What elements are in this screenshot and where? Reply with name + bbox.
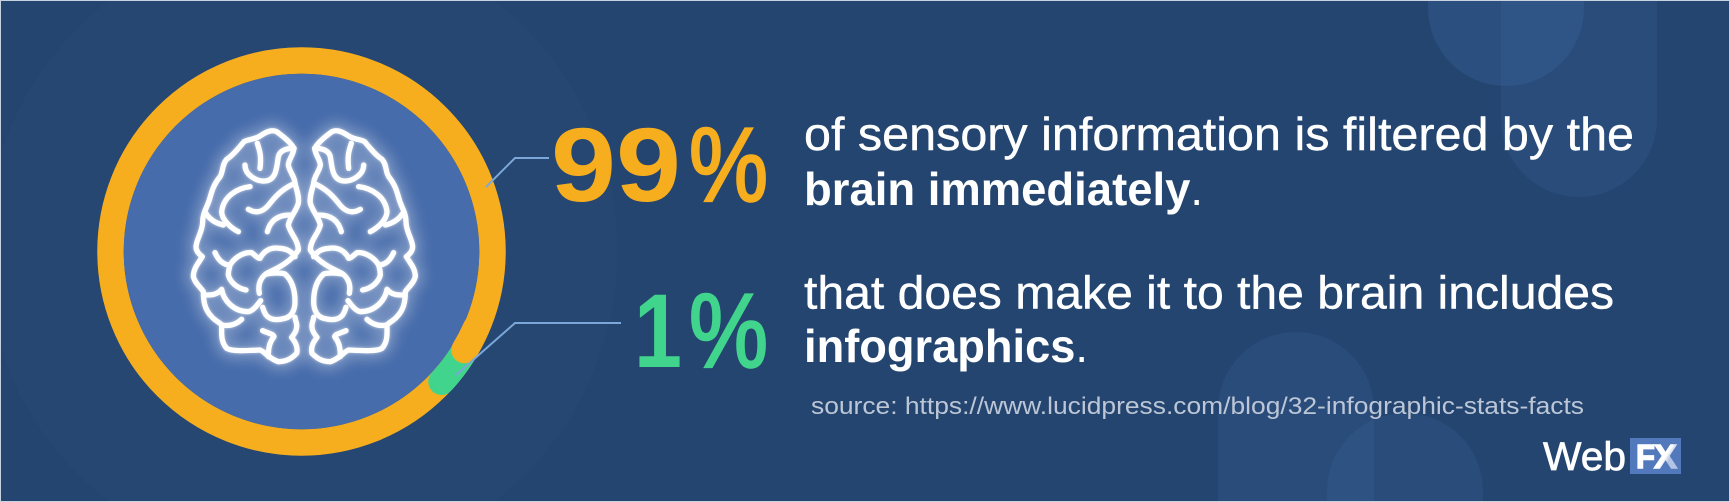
text block: 99% description: of sensory information is filtered by the — [804, 108, 1634, 160]
logo: WebFX — [1543, 435, 1681, 479]
stat: 1%: % — [689, 273, 768, 390]
ring: orange 99% — [110, 60, 492, 442]
stat: 99%: % — [689, 107, 768, 224]
text block: 1% description — [804, 266, 1614, 372]
text block: 1% description: that does make it to the brain includes — [804, 266, 1614, 318]
connector line: 99% — [486, 158, 549, 187]
background shapes: bottom pills — [1218, 332, 1483, 502]
inner blue disc — [124, 74, 479, 429]
text block: 1% description: infographics. — [804, 320, 1088, 372]
connector line: 1% — [456, 323, 621, 375]
stat: 99%: 99 — [551, 107, 681, 224]
source line: source: https://www.lucidpress.com/blog/32-infographic-stats-facts — [811, 393, 1584, 420]
ring segment: green 1% — [442, 353, 464, 382]
stat: 99% — [551, 107, 768, 224]
logo: WebFX: X — [1654, 438, 1677, 475]
icon: glowing brain — [193, 131, 415, 362]
text block: 99% description: brain immediately. — [804, 163, 1203, 215]
text block: 99% description — [804, 108, 1634, 215]
background shapes: top right pills — [1428, 0, 1657, 197]
donut chart: 99% and 1% — [110, 60, 492, 442]
stat: 1% — [634, 273, 768, 390]
ring end cap: orange — [464, 328, 476, 350]
logo: WebFX: Web — [1543, 435, 1626, 479]
stat: 1%: 1 — [634, 273, 682, 390]
logo: WebFX: F — [1636, 438, 1655, 475]
background shape: large faint circle — [0, 0, 618, 502]
